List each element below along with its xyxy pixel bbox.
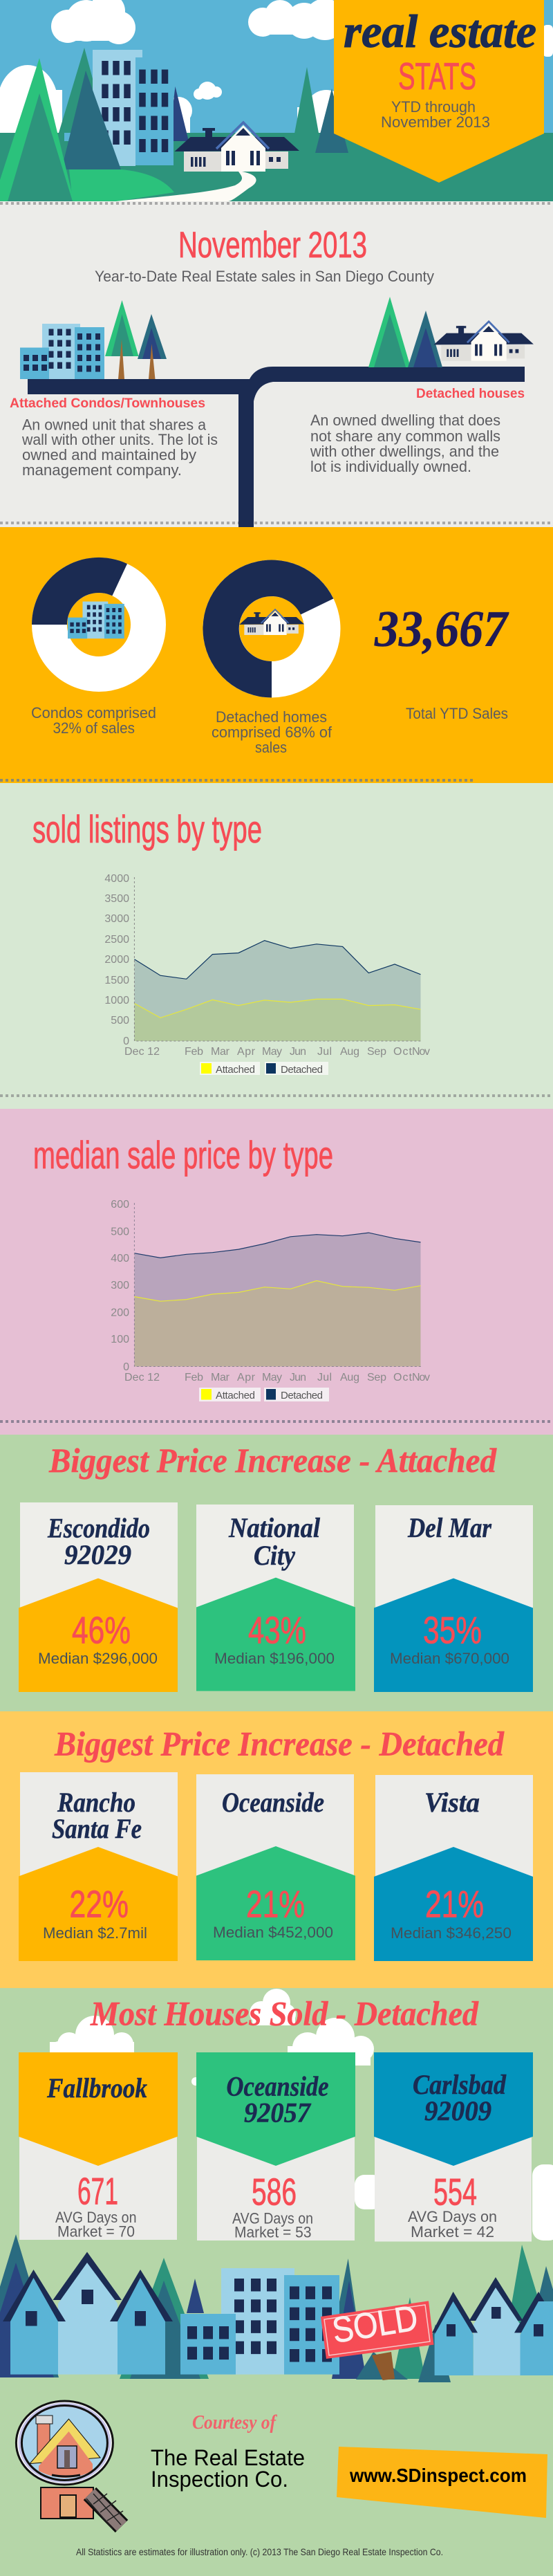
card: National City: 43% <box>248 1609 306 1652</box>
text: attached definition: wall with other units. The lot is <box>21 431 218 448</box>
label: attached: Attached Condos/Townhouses <box>10 396 205 411</box>
x axis labels: Nov <box>412 1372 430 1383</box>
card: Carlsbad 92009 <box>374 2052 533 2241</box>
card: Escondido <box>19 1502 178 1692</box>
card: National City <box>196 1505 355 1691</box>
legend <box>200 1062 328 1076</box>
card: National City: Median $196,000 <box>214 1650 335 1667</box>
icon: clouds <box>0 0 553 142</box>
stat: total: 33,667 <box>374 601 509 658</box>
text: detached definition: not share any common walls <box>310 427 500 445</box>
legend <box>199 1388 329 1401</box>
y axis labels: 1500 <box>104 975 129 986</box>
y axis labels: 300 <box>111 1280 129 1291</box>
icon: path to house <box>116 172 256 201</box>
y axis labels: 0 <box>123 1036 129 1047</box>
y axis labels: 100 <box>111 1334 129 1345</box>
heading: November 2013: November 2013 <box>178 225 367 266</box>
caption: detached: Detached homes <box>216 708 327 726</box>
sold sign: SOLD <box>330 2298 420 2351</box>
card: Oceanside: Median $452,000 <box>213 1924 333 1941</box>
legend: Detached <box>281 1390 323 1401</box>
caption: condos <box>31 704 156 737</box>
trees behind houses <box>0 2234 553 2382</box>
x axis labels: Jun <box>290 1046 306 1058</box>
x axis labels: Feb <box>185 1046 203 1058</box>
legend: Attached <box>216 1064 255 1076</box>
panel: median price <box>0 1109 553 1435</box>
card: Vista: 21% <box>425 1882 484 1925</box>
card: Del Mar <box>374 1505 533 1692</box>
hills <box>0 133 553 201</box>
icon: trees right <box>292 67 348 153</box>
card: Vista: Median $346,250 <box>391 1924 512 1942</box>
chart: median price <box>111 1199 430 1401</box>
x axis labels: Jul <box>317 1372 332 1383</box>
y axis labels: 400 <box>111 1253 129 1264</box>
card: Fallbrook: 671 <box>77 2170 118 2213</box>
caption: detached <box>212 708 332 756</box>
x axis labels: Aug <box>340 1372 359 1383</box>
card: Oceanside 92057: Oceanside <box>227 2071 329 2101</box>
heading: sold listings: sold listings by type <box>32 807 262 851</box>
card: Fallbrook: AVG Days on <box>55 2209 137 2226</box>
x axis labels: Oct <box>393 1372 413 1383</box>
x axis labels: May <box>262 1046 282 1058</box>
card: Carlsbad 92009: Carlsbad <box>413 2069 507 2100</box>
card: National City: National <box>228 1512 321 1543</box>
text: company name: The Real Estate <box>151 2445 305 2470</box>
panel: biggest increase attached <box>0 1435 553 1711</box>
card: Oceanside 92057 <box>196 2052 355 2241</box>
subtitle: YTD through <box>391 98 476 116</box>
buildings <box>180 2268 339 2375</box>
card: Oceanside: Oceanside <box>222 1787 324 1818</box>
subtitle: Year-to-Date Real Estate sales in San Diego County <box>95 268 434 285</box>
card: Carlsbad 92009: AVG Days on <box>408 2208 497 2225</box>
card: Oceanside <box>196 1774 355 1960</box>
y axis labels: 2500 <box>104 934 129 946</box>
sold sign <box>321 2298 434 2380</box>
town illustration <box>0 2234 553 2382</box>
donut: detached <box>203 560 333 697</box>
text: attached definition: management company. <box>22 461 182 479</box>
card: Vista <box>374 1775 533 1961</box>
card: Oceanside 92057: Market = 53 <box>234 2223 311 2241</box>
card: Rancho Santa Fe: Median $2.7mil <box>43 1924 147 1942</box>
text: attached definition <box>21 416 218 479</box>
panel: sales share <box>0 527 553 783</box>
x axis labels: Jun <box>290 1372 306 1383</box>
legend: Detached <box>281 1064 323 1076</box>
card: Carlsbad 92009: Market = 42 <box>411 2223 494 2241</box>
card: Fallbrook: Fallbrook <box>46 2072 147 2104</box>
x axis labels: Sep <box>367 1372 386 1383</box>
x axis labels: Oct <box>393 1046 413 1058</box>
card: Oceanside 92057: 586 <box>252 2171 297 2214</box>
x axis labels: Dec 12 <box>124 1046 160 1058</box>
y axis labels: 3000 <box>104 913 129 925</box>
text: detached definition: lot is individually owned. <box>310 458 471 475</box>
text: detached definition: with other dwellings, and the <box>310 443 499 460</box>
card: Carlsbad 92009: 554 <box>433 2171 477 2214</box>
x axis labels: Jul <box>317 1046 332 1058</box>
card: Rancho Santa Fe: Rancho <box>57 1787 135 1818</box>
subtitle: November 2013 <box>381 113 490 131</box>
card: Del Mar: 35% <box>423 1609 482 1652</box>
panel: sold listings <box>0 783 553 1109</box>
x axis labels: Nov <box>412 1046 430 1058</box>
y axis labels: 500 <box>111 1226 129 1238</box>
title: stats: STATS <box>398 55 476 98</box>
caption: detached: sales <box>255 739 287 756</box>
text: courtesy of: Courtesy of <box>192 2412 277 2434</box>
y axis labels: 2000 <box>104 954 129 966</box>
x axis labels: Dec 12 <box>124 1372 160 1383</box>
card: National City: City <box>254 1540 295 1571</box>
card: Rancho Santa Fe <box>19 1772 178 1961</box>
card: Rancho Santa Fe: Santa Fe <box>52 1813 142 1844</box>
y axis labels: 200 <box>111 1307 129 1318</box>
banner <box>334 0 544 183</box>
card: Fallbrook: Market = 70 <box>57 2223 135 2241</box>
y axis labels: 3500 <box>104 893 129 905</box>
heading: Biggest Price Increase - Detached <box>54 1724 505 1763</box>
callout: website <box>337 2447 547 2518</box>
x axis labels: Mar <box>211 1046 230 1058</box>
y axis labels: 4000 <box>104 873 129 885</box>
caption: detached: comprised 68% of <box>212 724 332 741</box>
donut: condos <box>32 558 149 674</box>
x axis labels: Feb <box>185 1372 203 1383</box>
text: company name <box>151 2445 305 2492</box>
card: Carlsbad 92009: 92009 <box>424 2095 491 2126</box>
y axis labels: 0 <box>123 1361 129 1373</box>
icon: condos and trees <box>20 300 167 379</box>
card: Escondido: Median $296,000 <box>38 1650 158 1667</box>
card: Del Mar: Median $670,000 <box>390 1650 509 1667</box>
legend: Attached <box>216 1390 255 1401</box>
title: real estate: real estate <box>344 5 536 57</box>
panel: most houses sold <box>0 1988 553 2576</box>
card: Oceanside 92057: 92057 <box>244 2097 312 2128</box>
card: Del Mar: Del Mar <box>407 1512 491 1543</box>
callout: website: www.SDinspect.com <box>349 2465 527 2486</box>
logo: magnifier and house <box>16 2401 123 2529</box>
panel: definitions <box>0 201 553 527</box>
heading: median price: median sale price by type <box>33 1133 333 1177</box>
text: footer note: All Statistics are estimates for illustration only. (c) 2013 The San Diego Real Estate Inspection Co. <box>76 2546 443 2557</box>
panel: biggest increase detached <box>0 1711 553 1988</box>
caption: condos: Condos comprised <box>31 704 156 721</box>
x axis labels: Sep <box>367 1046 386 1058</box>
x axis labels: May <box>262 1372 282 1383</box>
card: Vista: Vista <box>424 1787 480 1818</box>
header illustration panel <box>0 0 553 201</box>
y axis labels: 1000 <box>104 995 129 1006</box>
text: attached definition: An owned unit that shares a <box>22 416 207 433</box>
caption: condos: 32% of sales <box>53 719 135 737</box>
x axis labels <box>124 1046 430 1058</box>
card: Escondido: 92029 <box>64 1539 131 1570</box>
card: Fallbrook <box>19 2052 178 2241</box>
icon: house <box>174 122 299 172</box>
icon: trees left <box>0 58 174 201</box>
heading: Biggest Price Increase - Attached <box>48 1441 497 1480</box>
road <box>28 367 525 527</box>
text: attached definition: owned and maintained by <box>22 446 196 463</box>
card: Rancho Santa Fe: 22% <box>69 1882 129 1925</box>
label: detached: Detached houses <box>416 387 525 401</box>
y axis labels: 500 <box>111 1015 129 1027</box>
card: Oceanside 92057: AVG Days on <box>232 2210 313 2227</box>
card: Escondido: 46% <box>72 1609 131 1652</box>
x axis labels: Apr <box>237 1372 256 1383</box>
houses right <box>432 2277 553 2375</box>
text: detached definition: An owned dwelling that does <box>310 412 500 429</box>
card: Oceanside: 21% <box>246 1882 305 1925</box>
x axis labels: Aug <box>340 1046 359 1058</box>
text: detached definition <box>310 412 500 475</box>
houses left <box>3 2252 173 2375</box>
heading: Most Houses Sold - Detached <box>90 1994 479 2033</box>
subtitle <box>381 98 490 131</box>
y axis labels <box>104 873 129 1047</box>
y axis labels: 600 <box>111 1199 129 1211</box>
x axis labels <box>124 1372 430 1383</box>
icon: city buildings <box>59 48 189 166</box>
x axis labels: Apr <box>237 1046 256 1058</box>
icon: clouds <box>50 1989 553 2241</box>
text: company name: Inspection Co. <box>151 2467 288 2492</box>
caption: total: Total YTD Sales <box>406 705 508 722</box>
icon: trees and house <box>368 297 534 367</box>
y axis labels <box>111 1199 129 1373</box>
chart: sold listings <box>104 873 430 1076</box>
x axis labels: Mar <box>211 1372 230 1383</box>
card: Escondido: Escondido <box>47 1512 150 1543</box>
